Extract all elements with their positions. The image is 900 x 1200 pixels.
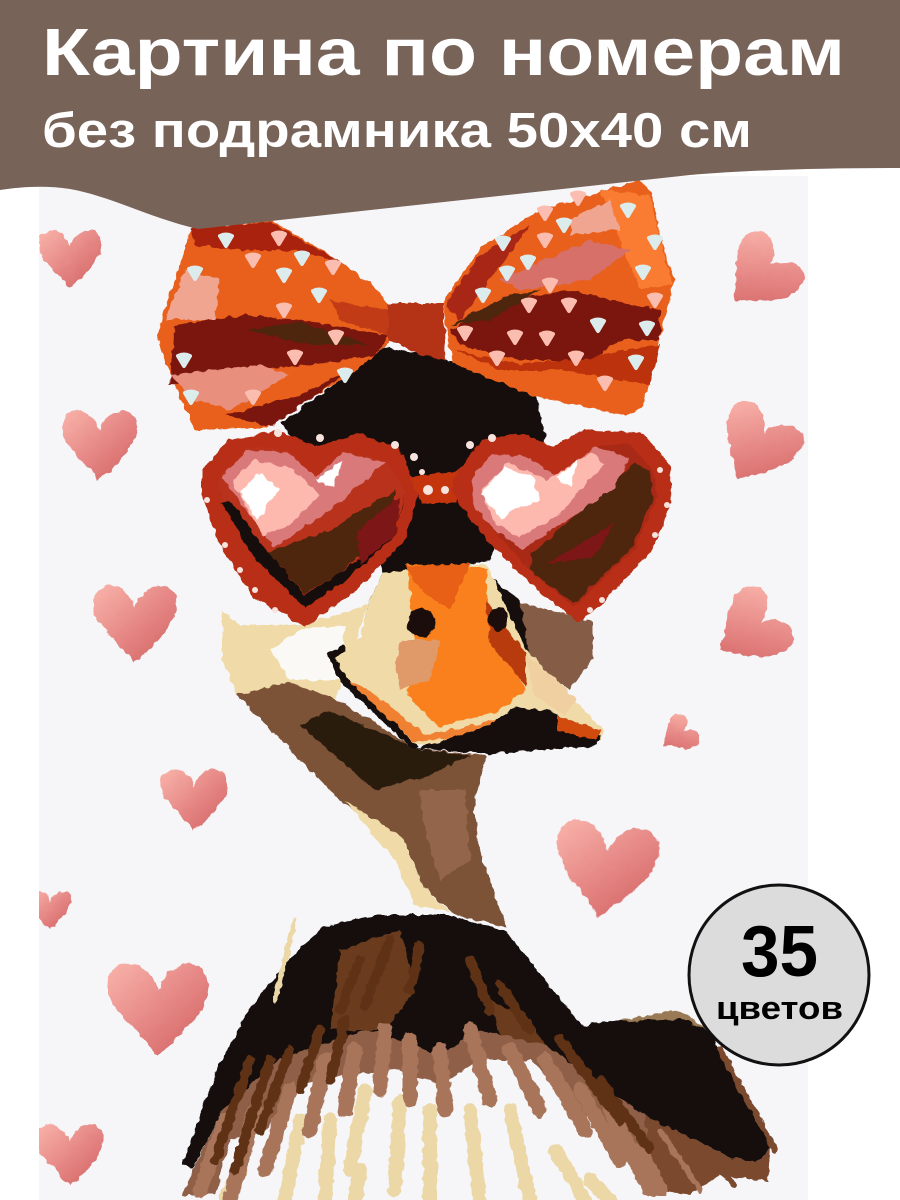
header banner [0,0,900,229]
bow polka dots: pale [178,204,661,403]
badge: 35 colours [689,885,869,1065]
nostril [407,609,435,637]
badge: 35 colours: цветов [716,990,843,1026]
left glasses lens frame [202,430,419,627]
mouth [415,707,601,754]
plumage streaks [200,920,775,1200]
bow polka dots: pink [247,192,661,403]
right wing fringe [644,1115,771,1195]
beak [330,564,605,752]
panel: painting canvas [39,176,808,1200]
goose head cream feathers [222,605,368,699]
title: Картина по номерам [42,15,845,90]
goose neck and chin [237,682,506,927]
goose body dark plumage [182,915,771,1168]
dark brown plumage patches [330,930,415,1030]
black head [281,347,546,575]
goose body brown fringe [182,1009,700,1195]
left lens [219,447,407,607]
glasses bridge [409,470,460,503]
beak outline [331,648,416,748]
frame dots [204,429,670,613]
badge: 35 colours: 35 [741,912,818,992]
eye [488,607,508,631]
feathers right of beak [514,601,593,690]
subtitle: без подрамника 50х40 см [42,104,752,158]
goose illustration [157,180,775,1200]
hearts pattern [29,224,811,1186]
bow knot [388,303,446,360]
right lens [471,443,657,607]
right glasses lens frame [453,430,672,623]
bow left lobe [157,220,388,430]
bow right lobe [443,180,674,415]
